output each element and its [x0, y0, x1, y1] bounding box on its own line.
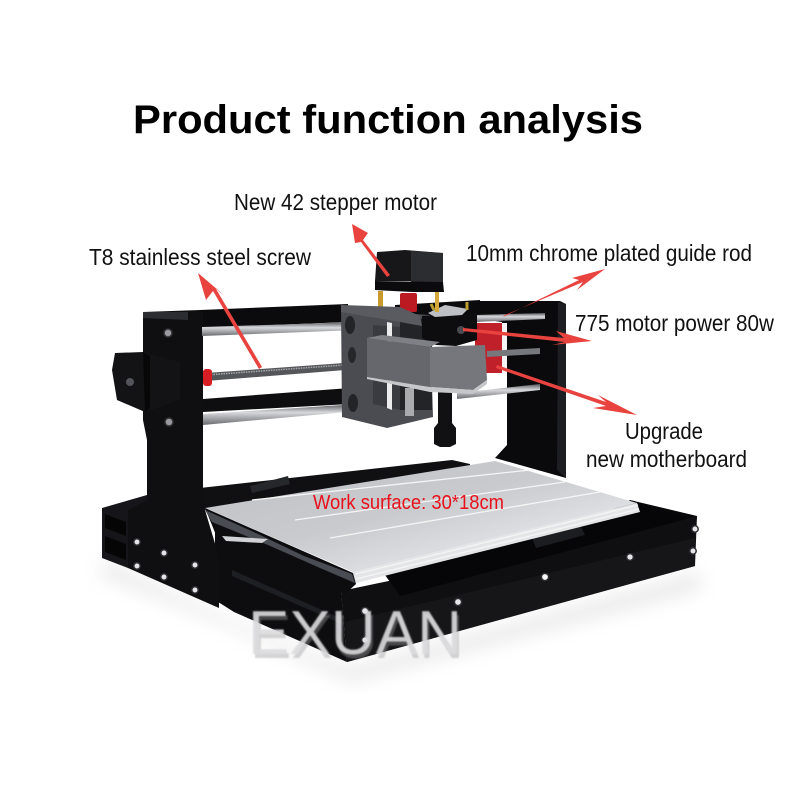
label: stepper motor: New 42 stepper motor	[234, 189, 437, 215]
gantry right upright	[473, 301, 566, 478]
arrow: 775 motor	[463, 328, 592, 345]
arrow: guide rod	[503, 269, 605, 317]
foot screws	[134, 539, 198, 593]
lower chrome rod	[203, 404, 358, 425]
carriage	[341, 302, 487, 447]
table shadow underlay	[205, 508, 356, 594]
lower dark beam	[203, 388, 350, 412]
table T-slot end	[205, 510, 355, 583]
upper chrome rod	[202, 322, 358, 336]
arrow: lead screw	[198, 273, 262, 369]
right base rail	[520, 500, 697, 580]
label: 775 motor: 775 motor power 80w	[575, 310, 775, 336]
front base beam	[341, 516, 697, 662]
arrow: stepper motor	[352, 224, 390, 277]
label: work surface: Work surface: 30*18cm	[313, 492, 504, 514]
white gap beside motherboard	[502, 323, 507, 373]
red coupling	[203, 369, 212, 386]
left base side	[215, 530, 347, 662]
rods and lead screw	[202, 313, 545, 425]
label: guide rod: 10mm chrome plated guide rod	[466, 240, 752, 266]
label: motherboard: new motherboard	[586, 446, 747, 472]
aluminium work table	[205, 461, 640, 594]
base screws	[361, 526, 698, 643]
arrow: motherboard	[496, 365, 637, 415]
left upright and foot	[128, 310, 219, 608]
carriage opening	[373, 325, 400, 410]
red coupler	[400, 293, 417, 312]
brass standoffs	[378, 291, 383, 313]
top plate of carriage	[341, 305, 422, 326]
watermark: EXUAN	[250, 603, 464, 672]
rear plate	[341, 305, 433, 428]
machine illustration	[100, 250, 700, 682]
spindle collet	[434, 390, 456, 447]
775 spindle motor	[422, 313, 477, 346]
rod holes	[345, 316, 355, 334]
rear top beam behind spindle	[395, 300, 480, 320]
gantry left base end	[102, 495, 147, 568]
watermark: EXUAN	[248, 599, 462, 668]
ground shadow	[100, 560, 700, 682]
right chrome rods	[475, 313, 545, 322]
left stepper motor	[112, 352, 180, 412]
label: motherboard	[586, 418, 747, 472]
front mount block	[367, 338, 430, 387]
T8 lead screw	[206, 362, 358, 381]
rear base rail and Y stepper	[200, 460, 470, 510]
Z lead screw	[405, 388, 414, 416]
label: lead screw: T8 stainless steel screw	[89, 244, 312, 270]
Z stepper motor	[375, 250, 444, 313]
label: motherboard: Upgrade	[625, 418, 703, 444]
motor top	[428, 305, 468, 317]
base inner shadow	[380, 506, 690, 596]
title: Product function analysis	[133, 98, 643, 142]
gantry top beam	[200, 304, 348, 328]
base frame	[102, 460, 698, 662]
frame bolts	[164, 329, 172, 337]
motherboard	[475, 323, 502, 373]
